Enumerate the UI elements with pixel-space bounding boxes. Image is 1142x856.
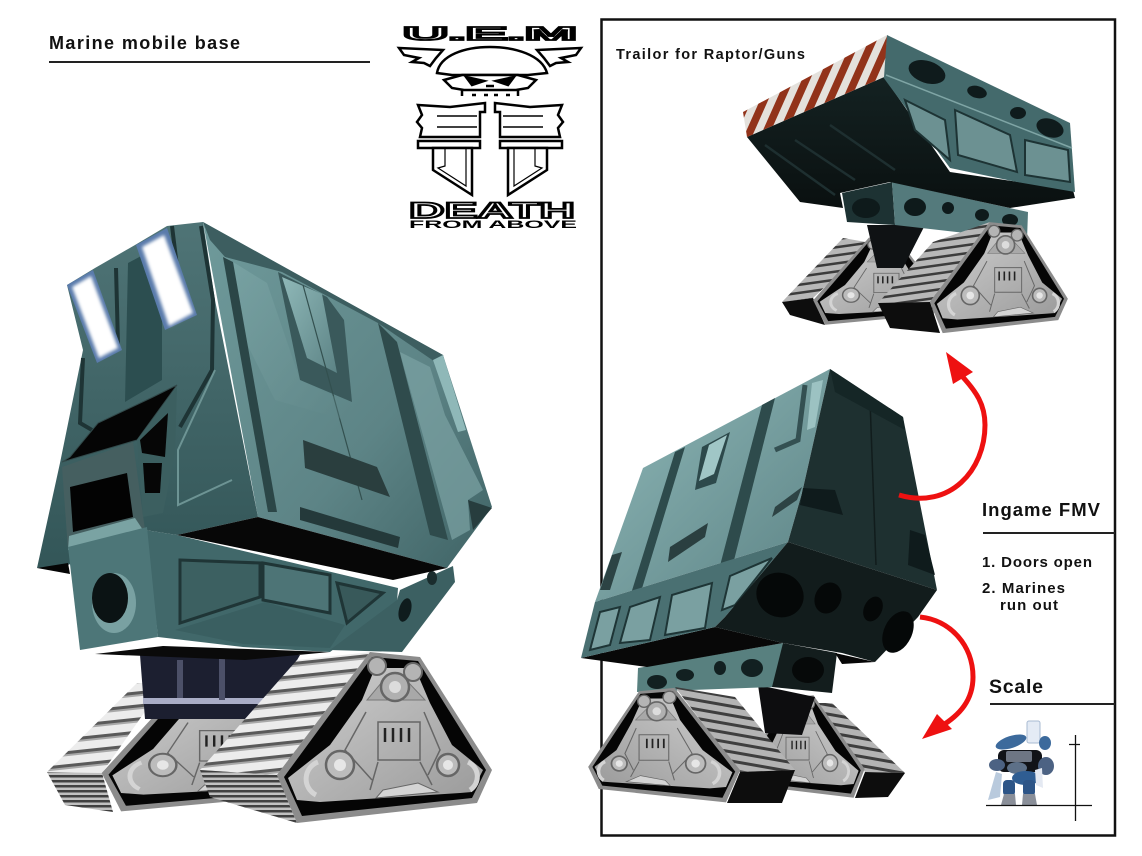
side door seam	[303, 285, 362, 500]
underside left sliver	[37, 563, 70, 574]
dark face ports	[749, 565, 920, 658]
lower teal band	[581, 542, 788, 658]
arrow: down	[920, 617, 973, 739]
side upper right panel	[400, 352, 483, 540]
side corner notch	[468, 500, 492, 530]
trailer lower neck	[867, 225, 925, 268]
arrow: up	[899, 352, 985, 498]
scale figure: marine	[988, 721, 1054, 805]
door stripes and panels	[600, 380, 823, 597]
text: FMV steps: run out	[1000, 597, 1058, 614]
trailer side split	[886, 75, 1072, 148]
front chamfer highlight	[178, 370, 232, 505]
text: FMV steps: 2. Marines	[982, 580, 1065, 597]
logo text: FROM ABOVE: FROM ABOVE	[409, 219, 577, 231]
trailer neck teal part	[892, 182, 1028, 240]
side top band	[203, 222, 447, 370]
lower shadow neck	[758, 685, 815, 735]
hull lower strip	[175, 602, 345, 648]
heading: Scale: Scale	[989, 676, 1043, 698]
trailer front track	[878, 222, 1068, 333]
upper dark face details	[800, 369, 935, 575]
trailer side holes	[906, 56, 1066, 141]
front track	[588, 687, 795, 803]
trailer underside panels	[765, 125, 895, 195]
side small door	[282, 277, 337, 373]
upper dark face	[788, 369, 937, 590]
lower dark face with ports	[715, 542, 937, 662]
sensor box	[62, 385, 177, 550]
rear track	[746, 695, 905, 798]
hull side face	[203, 222, 492, 568]
text: FMV steps	[982, 554, 1092, 614]
undercarriage	[140, 655, 300, 719]
lower band panels	[590, 558, 772, 650]
right track	[200, 652, 492, 823]
side upper right window	[433, 355, 466, 432]
logo emblem: skull, fists and blades	[399, 47, 581, 195]
side window	[303, 440, 390, 497]
sensor box lower panel with port	[68, 527, 158, 650]
left track	[47, 675, 310, 812]
trailer neck dark part	[842, 182, 895, 225]
illustration: trailer top view	[743, 35, 1075, 333]
hazard stripe panel	[743, 35, 887, 137]
scale marker	[986, 735, 1092, 821]
upper teal doors	[595, 369, 830, 602]
logo text: DEATH: DEATH	[409, 198, 575, 223]
arm bracket	[330, 566, 455, 652]
hull recess panels	[180, 560, 383, 623]
neck holes	[647, 657, 824, 689]
illustration: FMV base with doors	[581, 369, 937, 803]
caption: Trailor for Raptor/Guns: Trailor for Raptor/Guns	[616, 47, 805, 63]
black strip under hull	[95, 646, 330, 660]
heading: Marine mobile base: Marine mobile base	[49, 33, 240, 53]
logo: U.E.M Death From Above	[399, 24, 581, 231]
black underside	[581, 627, 783, 667]
underside	[177, 517, 447, 580]
side recessed door frame	[278, 272, 352, 402]
heading: Ingame FMV	[982, 499, 1115, 534]
trailer rear track	[782, 238, 942, 325]
heading: Scale	[989, 676, 1115, 705]
text: FMV steps: 1. Doors open	[982, 554, 1092, 571]
front face	[37, 222, 258, 568]
logo text: U.E.M: U.E.M	[403, 24, 577, 44]
front dark centre panel	[125, 245, 162, 402]
headlights	[67, 228, 197, 363]
neck teal part	[637, 643, 783, 692]
heading: Ingame FMV: Ingame FMV	[982, 499, 1101, 520]
underside right sliver	[835, 653, 875, 664]
trailer neck holes	[852, 198, 1018, 226]
lower hull	[145, 530, 398, 652]
trailer side panels	[905, 100, 1070, 182]
illustration: large mobile base	[37, 222, 492, 823]
side window lower	[300, 507, 400, 548]
trailer dark underside	[747, 77, 1075, 208]
trailer side face	[883, 35, 1075, 192]
side wide stripe	[378, 323, 448, 540]
neck dark part	[772, 643, 837, 693]
panel: FMV frame	[602, 20, 1115, 836]
front panel lines	[80, 226, 213, 430]
side corner stripe	[223, 257, 277, 512]
side light panel left	[225, 257, 352, 420]
